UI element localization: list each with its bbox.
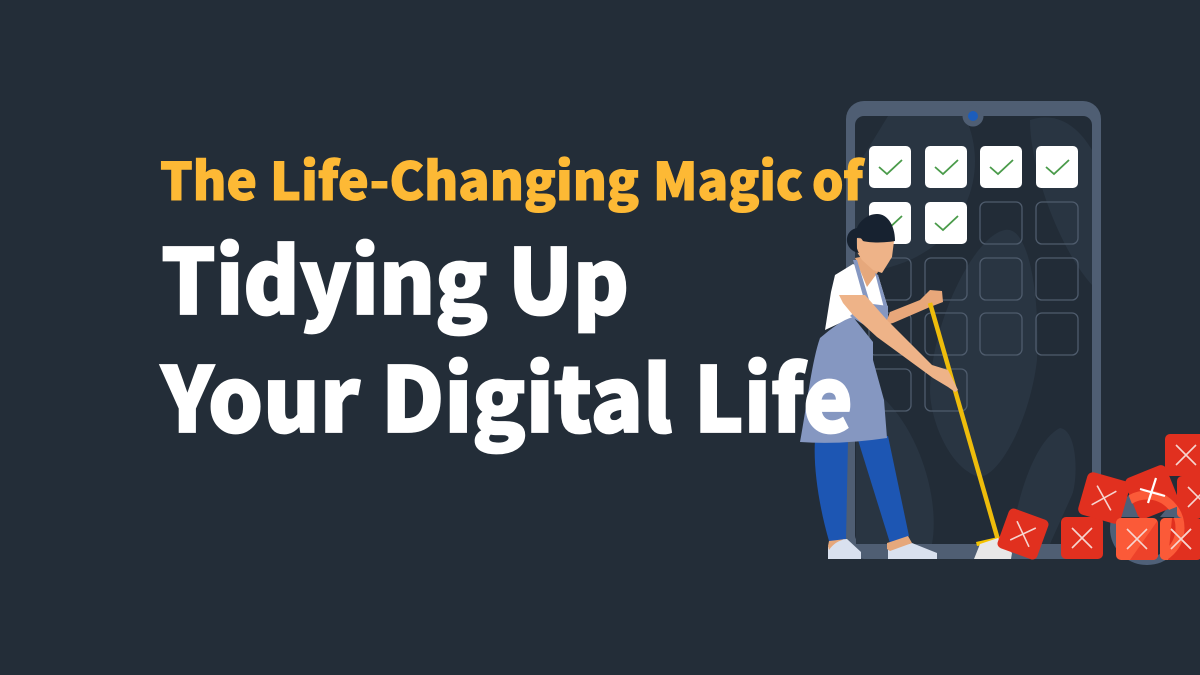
title: Digital [381, 328, 672, 458]
phone screen [855, 116, 1092, 544]
checked tiles [869, 146, 1078, 244]
broom [930, 303, 1012, 559]
head [847, 214, 895, 287]
title: Life [694, 328, 853, 458]
right arm and hand [839, 295, 958, 392]
neck [855, 255, 878, 287]
tile crosses over watermark [1127, 529, 1147, 549]
title [160, 210, 853, 458]
illustration: person sweeping [800, 214, 1012, 559]
subtitle: Magic [653, 140, 803, 215]
icon: recycling watermark overlay [1114, 478, 1191, 561]
subtitle: Life-Changing [270, 140, 639, 215]
left arm [885, 290, 943, 325]
subtitle [160, 140, 865, 215]
hair [847, 214, 895, 253]
empty tiles [869, 202, 1078, 411]
camera notch [962, 106, 984, 126]
icon: recycling ring behind tiles [1114, 493, 1182, 561]
discarded red tiles [996, 434, 1200, 561]
title: Up [508, 210, 629, 340]
legs [815, 436, 909, 543]
title: Your [160, 328, 360, 458]
subtitle: The [160, 140, 257, 215]
shoes [828, 539, 937, 559]
phone frame [846, 101, 1101, 559]
screen background shapes [855, 116, 1092, 544]
subtitle: of [812, 140, 865, 215]
icon: phone [846, 101, 1101, 559]
shirt [825, 264, 888, 330]
apron [800, 260, 888, 443]
title: Tidying [161, 210, 488, 340]
face [857, 238, 894, 273]
